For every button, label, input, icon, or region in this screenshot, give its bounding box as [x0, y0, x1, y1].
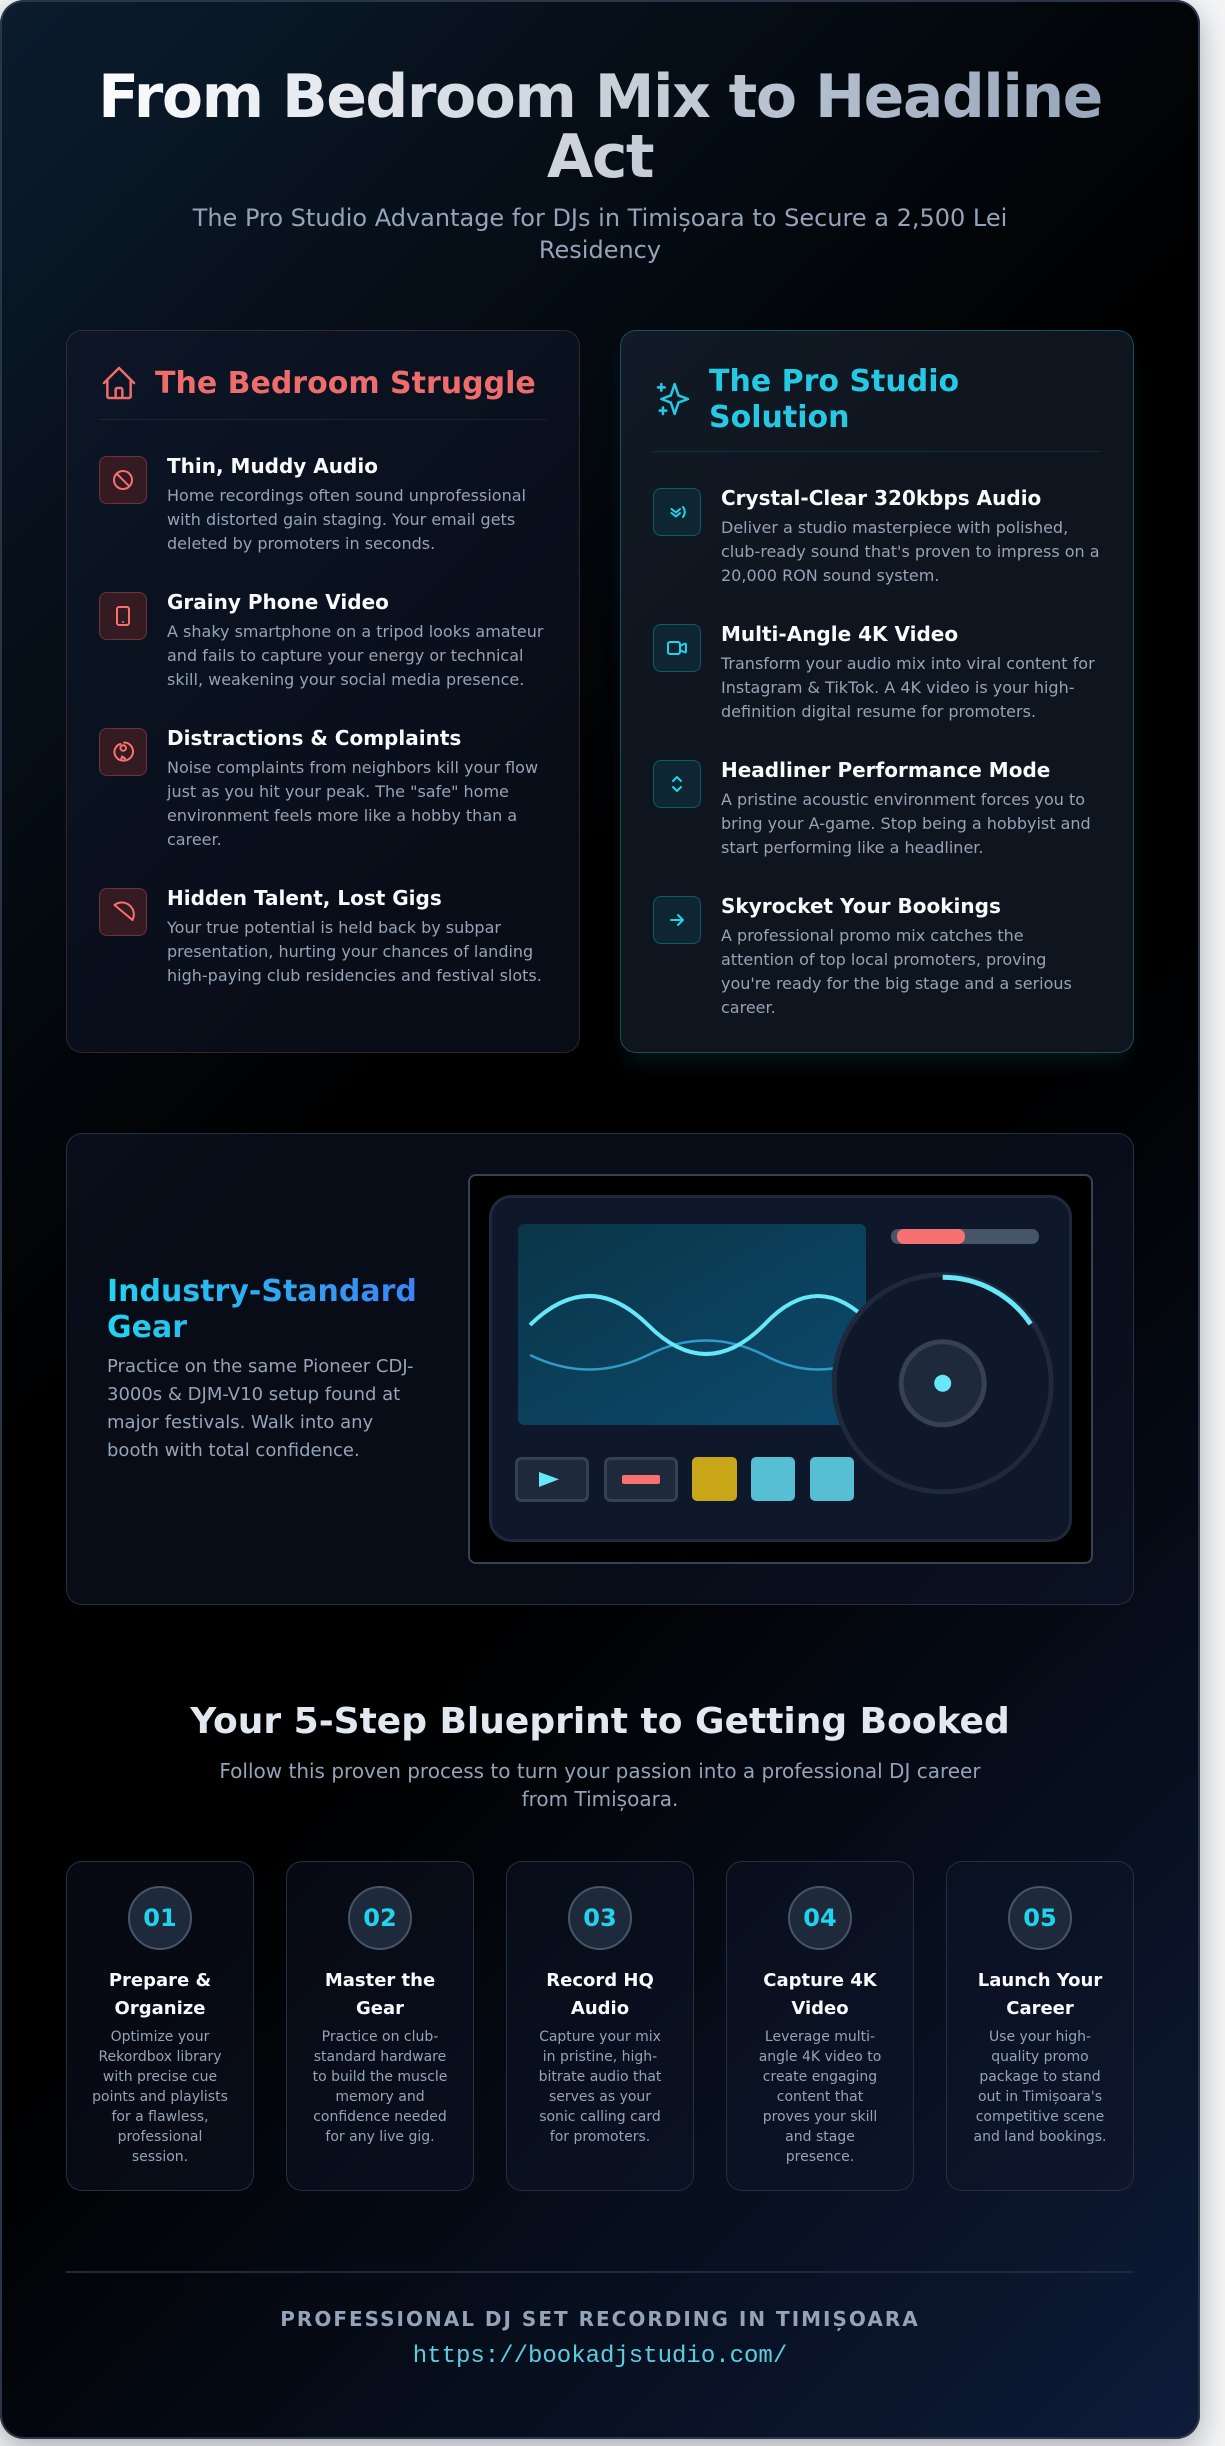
step description: package to stand: [979, 2069, 1101, 2085]
step description: create engaging: [763, 2069, 877, 2085]
item: crystal clear audio: [653, 486, 1100, 585]
item description: Transform your audio mix into viral content for: [721, 654, 1095, 673]
step description: to build the muscle: [313, 2069, 447, 2085]
play button: [516, 1458, 588, 1500]
console body: [490, 1196, 1070, 1540]
item description: definition digital resume for promoters.: [721, 702, 1036, 721]
item description: just as you hit your peak. The "safe" home: [167, 782, 509, 801]
step title: [109, 1970, 211, 2019]
item description: A professional promo mix catches the: [721, 926, 1024, 945]
step number: 01: [143, 1904, 177, 1932]
jog wheel: [834, 1275, 1051, 1492]
footer url: https://bookadjstudio.com/: [413, 2343, 787, 2370]
step description: sonic calling card: [539, 2109, 661, 2125]
item title: Distractions & Complaints: [167, 726, 461, 750]
step title: [325, 1970, 435, 2019]
steps subtitle: [219, 1759, 981, 1811]
step description: professional: [118, 2129, 202, 2145]
gear description: booth with total confidence.: [107, 1440, 360, 1461]
item: skyrocket bookings: [653, 894, 1072, 1017]
item description: high-paying club residencies and festival slots.: [167, 966, 542, 985]
illustration: DJ console: [468, 1174, 1093, 1564]
item description: [167, 918, 542, 985]
step description: proves your skill: [763, 2109, 877, 2125]
step description: standard hardware: [314, 2049, 446, 2065]
step title: [978, 1970, 1102, 2019]
icon: swirl: [99, 728, 147, 776]
steps subtitle: from Timișoara.: [522, 1787, 678, 1811]
item description: [721, 926, 1072, 1017]
step card 4: [726, 1861, 914, 2191]
step number: [348, 1886, 412, 1950]
item description: and fails to capture your energy or technical: [167, 646, 523, 665]
item description: with distorted gain staging. Your email gets: [167, 510, 515, 529]
item title: Thin, Muddy Audio: [167, 454, 378, 478]
step card 3: [506, 1861, 694, 2191]
subtitle: The Pro Studio Advantage for DJs in Timișoara to Secure a 2,500 Lei: [193, 204, 1007, 232]
step description: competitive scene: [976, 2109, 1104, 2125]
step description: for promoters.: [550, 2129, 650, 2145]
item description: A shaky smartphone on a tripod looks amateur: [167, 622, 543, 641]
gear description: 3000s & DJM-V10 setup found at: [107, 1384, 400, 1405]
step number: 05: [1023, 1904, 1057, 1932]
steps subtitle: Follow this proven process to turn your passion into a professional DJ career: [219, 1759, 981, 1783]
item description: career.: [721, 998, 776, 1017]
item: grainy phone video: [99, 590, 544, 689]
heading: the pro studio solution: The Pro Studio: [709, 364, 959, 399]
item description: environment feels more like a hobby than a: [167, 806, 517, 825]
step title: Prepare &: [109, 1970, 211, 1991]
title: Act: [547, 122, 653, 192]
subtitle: [192, 204, 1007, 264]
step title: Launch Your: [978, 1970, 1102, 1991]
item description: skill, weakening your social media presence.: [167, 670, 524, 689]
step title: Audio: [571, 1998, 629, 2019]
item description: [166, 758, 538, 849]
step description: Use your high-: [989, 2029, 1091, 2045]
gear heading: [107, 1274, 420, 1346]
icon: video camera: [653, 624, 701, 672]
step number: [788, 1886, 852, 1950]
step title: Record HQ: [546, 1970, 654, 1991]
item: thin muddy audio: [99, 454, 526, 553]
item description: [167, 622, 544, 689]
step description: in pristine, high-: [543, 2049, 657, 2065]
step title: Master the: [325, 1970, 435, 1991]
item description: Deliver a studio masterpiece with polished,: [721, 518, 1068, 537]
item: distractions and complaints: [99, 726, 538, 849]
gear description: major festivals. Walk into any: [107, 1412, 373, 1433]
step number: [568, 1886, 632, 1950]
step description: with precise cue: [103, 2069, 217, 2085]
icon: half disc: [99, 888, 147, 936]
step title: [546, 1970, 654, 2019]
step title: Career: [1006, 1998, 1074, 2019]
item title: Grainy Phone Video: [167, 590, 389, 614]
item description: career.: [167, 830, 222, 849]
item description: bring your A-game. Stop being a hobbyist and: [721, 814, 1091, 833]
step description: Leverage multi-: [765, 2029, 875, 2045]
step description: [759, 2029, 881, 2165]
item description: presentation, hurting your chances of landing: [167, 942, 533, 961]
item: headliner performance mode: [653, 758, 1091, 857]
step description: memory and: [335, 2089, 425, 2105]
step description: content that: [777, 2089, 863, 2105]
gear heading: Gear: [107, 1310, 187, 1345]
icon: house: [102, 366, 136, 400]
item title: Hidden Talent, Lost Gigs: [167, 886, 442, 910]
item description: Your true potential is held back by subpar: [167, 918, 501, 937]
stop button: [606, 1458, 676, 1500]
title: From Bedroom Mix to Headline: [98, 62, 1102, 132]
step description: Practice on club-: [322, 2029, 438, 2045]
pads: [692, 1457, 854, 1501]
item title: Crystal-Clear 320kbps Audio: [721, 486, 1041, 510]
item: hidden talent lost gigs: [99, 886, 542, 985]
step description: [92, 2029, 228, 2165]
item description: attention of top local promoters, proving: [721, 950, 1046, 969]
waveform screen: [518, 1224, 872, 1425]
item description: start performing like a headliner.: [721, 838, 983, 857]
item description: [167, 486, 526, 553]
item description: Home recordings often sound unprofessional: [167, 486, 526, 505]
icon: ban: [99, 456, 147, 504]
step number: [128, 1886, 192, 1950]
slider: [891, 1229, 1039, 1244]
item description: Noise complaints from neighbors kill your flow: [167, 758, 538, 777]
item description: [720, 654, 1095, 721]
step number: 02: [363, 1904, 397, 1932]
step description: [974, 2029, 1106, 2145]
step description: angle 4K video to: [759, 2049, 881, 2065]
panel: the bedroom struggle: [66, 330, 580, 1053]
step description: and stage: [785, 2129, 855, 2145]
step description: [313, 2029, 447, 2145]
item description: deleted by promoters in seconds.: [167, 534, 435, 553]
step description: bitrate audio that: [539, 2069, 661, 2085]
step number: 04: [803, 1904, 837, 1932]
item description: [721, 518, 1100, 585]
step description: for a flawless,: [111, 2109, 209, 2125]
icon: arrow right: [653, 896, 701, 944]
heading: the pro studio solution: Solution: [709, 400, 849, 435]
item description: [721, 790, 1091, 857]
step description: quality promo: [991, 2049, 1089, 2065]
item title: Skyrocket Your Bookings: [721, 894, 1001, 918]
step card 2: [286, 1861, 474, 2191]
step description: Capture your mix: [539, 2029, 661, 2045]
title: [66, 67, 1134, 188]
item description: club-ready sound that's proven to impress on a: [721, 542, 1100, 561]
step description: serves as your: [549, 2089, 651, 2105]
step description: for any live gig.: [325, 2129, 435, 2145]
steps heading: Your 5-Step Blueprint to Getting Booked: [190, 1701, 1010, 1742]
gear heading: Industry-Standard: [107, 1274, 417, 1309]
step title: [763, 1970, 878, 2019]
step title: Organize: [115, 1998, 205, 2019]
step description: confidence needed: [313, 2109, 447, 2125]
item description: 20,000 RON sound system.: [721, 566, 939, 585]
step description: Rekordbox library: [98, 2049, 222, 2065]
step description: [539, 2029, 662, 2145]
step card 1: [66, 1861, 254, 2191]
step description: presence.: [786, 2149, 854, 2165]
item description: you're ready for the big stage and a serious: [721, 974, 1072, 993]
panel: the pro studio solution: [620, 330, 1134, 1053]
icon: selector: [653, 760, 701, 808]
step description: out in Timișoara's: [978, 2089, 1102, 2105]
icon: sound: [653, 488, 701, 536]
step number: [1008, 1886, 1072, 1950]
heading: the bedroom struggle: The Bedroom Struggle: [155, 366, 536, 401]
item title: Multi-Angle 4K Video: [721, 622, 958, 646]
step card 5: [946, 1861, 1134, 2191]
footer label: PROFESSIONAL DJ SET RECORDING IN TIMIȘOARA: [280, 2307, 920, 2331]
step title: Capture 4K: [763, 1970, 877, 1991]
gear description: Practice on the same Pioneer CDJ-: [107, 1356, 414, 1377]
subtitle: Residency: [539, 236, 661, 264]
step description: points and playlists: [92, 2089, 228, 2105]
icon: sparkles: [656, 382, 690, 416]
step title: Gear: [356, 1998, 404, 2019]
step number: 03: [583, 1904, 617, 1932]
step title: Video: [791, 1998, 849, 2019]
item: multi-angle video: [653, 622, 1095, 721]
gear description: [107, 1356, 414, 1461]
icon: phone: [99, 592, 147, 640]
panel: industry-standard gear: [66, 1133, 1134, 1605]
item description: A pristine acoustic environment forces you to: [721, 790, 1085, 809]
step description: Optimize your: [111, 2029, 209, 2045]
step description: and land bookings.: [974, 2129, 1106, 2145]
item title: Headliner Performance Mode: [721, 758, 1050, 782]
heading: the pro studio solution: [709, 364, 959, 435]
step description: session.: [132, 2149, 188, 2165]
item description: Instagram & TikTok. A 4K video is your high-: [721, 678, 1074, 697]
